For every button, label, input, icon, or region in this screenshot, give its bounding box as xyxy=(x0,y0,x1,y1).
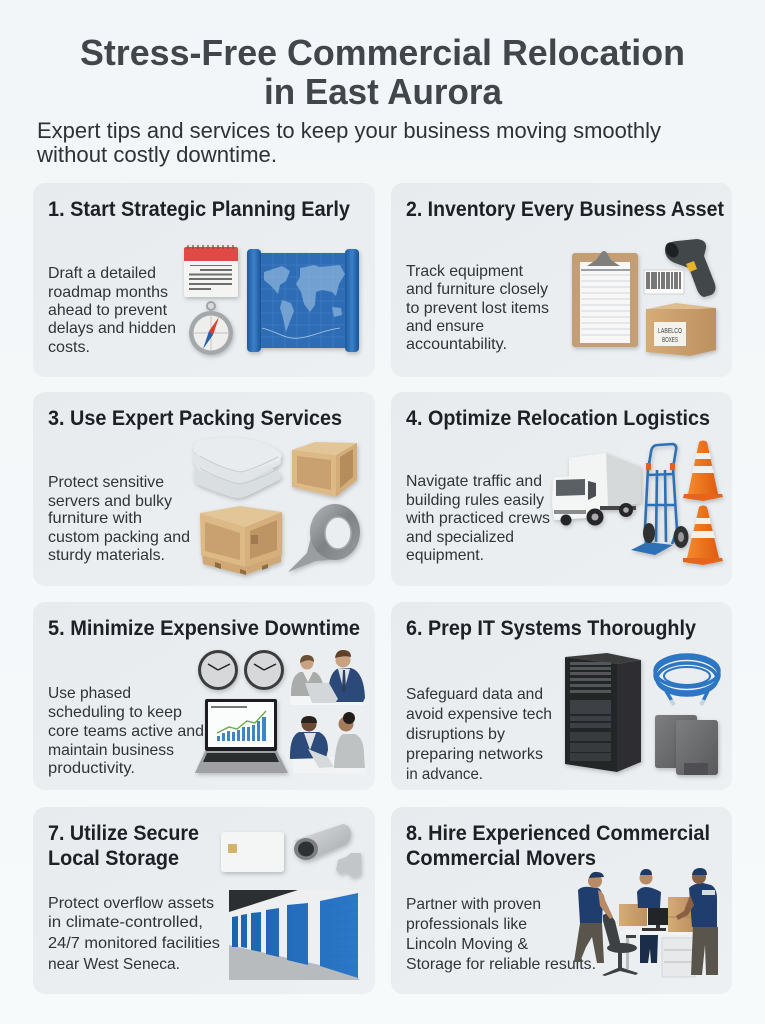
panel: 1 strategic planning xyxy=(33,183,375,377)
body text 1: Draft a detailed xyxy=(48,265,156,282)
body text 7: in climate-controlled, xyxy=(48,914,203,931)
body text 6: Safeguard data and xyxy=(406,686,543,703)
body text 4 xyxy=(405,473,550,564)
body text 4: and specialized xyxy=(406,529,514,546)
cardboard boxes xyxy=(619,897,693,932)
mover right xyxy=(676,868,718,975)
body text 2: to prevent lost items xyxy=(406,300,549,317)
icon: access card xyxy=(221,832,284,872)
panel: 8 movers xyxy=(391,807,732,994)
body text 7 xyxy=(48,895,220,973)
body text 1: ahead to prevent xyxy=(48,302,168,319)
icon: network cable xyxy=(655,655,719,705)
title: in East Aurora xyxy=(264,71,503,112)
icon: team at laptop, top xyxy=(290,650,365,705)
heading 4: 4. Optimize Relocation Logistics xyxy=(406,407,710,430)
panel: 3 packing xyxy=(33,392,375,586)
icon: moving truck xyxy=(552,453,641,526)
body text 3 xyxy=(48,474,190,564)
icon: traffic cone lower xyxy=(683,506,723,565)
body text 8 xyxy=(406,896,596,973)
icon: hand truck xyxy=(631,444,688,555)
body text 2 xyxy=(406,263,549,353)
subtitle: Expert tips and services to keep your business moving smoothly xyxy=(37,118,661,143)
body text 5: core teams active and xyxy=(48,723,204,740)
body text 6: preparing networks xyxy=(406,746,543,763)
icon: large crate xyxy=(200,506,282,575)
icon: labeled box xyxy=(646,303,716,356)
body text 4: building rules easily xyxy=(406,492,544,509)
mover left xyxy=(574,872,613,963)
icon: bubble wrap xyxy=(193,438,282,498)
body text 3: Protect sensitive xyxy=(48,474,164,491)
body text 6: avoid expensive tech xyxy=(406,706,552,723)
body text 2: Track equipment xyxy=(406,263,524,280)
heading 7: 7. Utilize Secure xyxy=(48,822,199,845)
icon: barcode label xyxy=(644,270,684,294)
monitor xyxy=(642,908,668,931)
icon: traffic cone upper xyxy=(683,440,723,501)
icon: labeled box: LABELCO xyxy=(658,328,682,335)
heading 6: 6. Prep IT Systems Thoroughly xyxy=(406,617,696,640)
body text 1 xyxy=(48,265,176,356)
panel: 2 inventory xyxy=(391,183,732,377)
body text 7: near West Seneca. xyxy=(48,956,180,973)
body text 5: Use phased xyxy=(48,685,131,702)
icon: world map blueprint xyxy=(247,249,359,352)
body text 8: Lincoln Moving & xyxy=(406,936,528,953)
heading 8 xyxy=(406,822,710,870)
body text 3: servers and bulky xyxy=(48,493,172,510)
body text 8: Storage for reliable results. xyxy=(406,956,596,973)
body text 8: professionals like xyxy=(406,916,527,933)
icon: barcode scanner xyxy=(663,239,716,297)
body text 4: equipment. xyxy=(406,547,484,564)
body text 5: maintain business xyxy=(48,742,174,759)
body text 6: disruptions by xyxy=(406,726,505,743)
title xyxy=(80,32,685,112)
body text 6 xyxy=(406,686,552,783)
icon: labeled box: BOXES xyxy=(662,337,678,344)
panel: 7 storage xyxy=(33,807,375,994)
icon: duct tape xyxy=(288,504,360,572)
body text 7: Protect overflow assets xyxy=(48,895,214,912)
subtitle: without costly downtime. xyxy=(36,142,277,167)
body text 3: custom packing and xyxy=(48,529,190,546)
icon: laptop with chart xyxy=(195,699,288,773)
desk and drawers xyxy=(620,930,695,977)
panel: 6 IT systems xyxy=(391,602,732,790)
icon: wall clocks xyxy=(198,650,284,690)
icon: security camera xyxy=(294,824,361,878)
panel: 5 downtime xyxy=(33,602,375,790)
body text 4: with practiced crews xyxy=(405,510,550,527)
body text 3: furniture with xyxy=(48,510,142,527)
body text 7: 24/7 monitored facilities xyxy=(48,935,220,952)
image: storage units xyxy=(229,890,360,980)
icon: calendar xyxy=(184,245,238,297)
icon: hard drives xyxy=(655,715,718,775)
heading 3: 3. Use Expert Packing Services xyxy=(48,407,342,430)
mover middle xyxy=(637,869,661,963)
body text 5 xyxy=(48,685,204,777)
title: Stress-Free Commercial Relocation xyxy=(80,32,685,73)
panel: 4 logistics xyxy=(391,392,732,586)
body text 2: accountability. xyxy=(406,336,507,353)
body text 2: and furniture closely xyxy=(406,281,548,298)
heading 2: 2. Inventory Every Business Asset xyxy=(406,198,724,221)
icon: team at laptop, bottom xyxy=(290,712,365,773)
body text 8: Partner with proven xyxy=(406,896,541,913)
heading 1: 1. Start Strategic Planning Early xyxy=(48,198,350,221)
office chair xyxy=(602,914,638,976)
subtitle xyxy=(36,118,661,167)
heading 7: Local Storage xyxy=(48,847,179,870)
heading 8: 8. Hire Experienced Commercial xyxy=(406,822,710,845)
body text 1: roadmap months xyxy=(48,284,168,301)
icon: server rack xyxy=(565,653,641,772)
heading 5: 5. Minimize Expensive Downtime xyxy=(48,617,360,640)
heading 8: Commercial Movers xyxy=(406,847,596,870)
body text 3: sturdy materials. xyxy=(48,547,165,564)
body text 5: scheduling to keep xyxy=(48,704,182,721)
body text 2: and ensure xyxy=(406,318,484,335)
icon: small crate xyxy=(292,442,357,497)
icon: compass xyxy=(189,302,233,355)
body text 1: costs. xyxy=(48,339,90,356)
body text 5: productivity. xyxy=(48,760,135,777)
body text 1: delays and hidden xyxy=(48,320,176,337)
body text 4: Navigate traffic and xyxy=(406,473,542,490)
body text 6: in advance. xyxy=(406,766,483,783)
icon: clipboard xyxy=(572,251,638,347)
icon: movers with office furniture xyxy=(574,868,718,977)
heading 7 xyxy=(48,822,199,870)
